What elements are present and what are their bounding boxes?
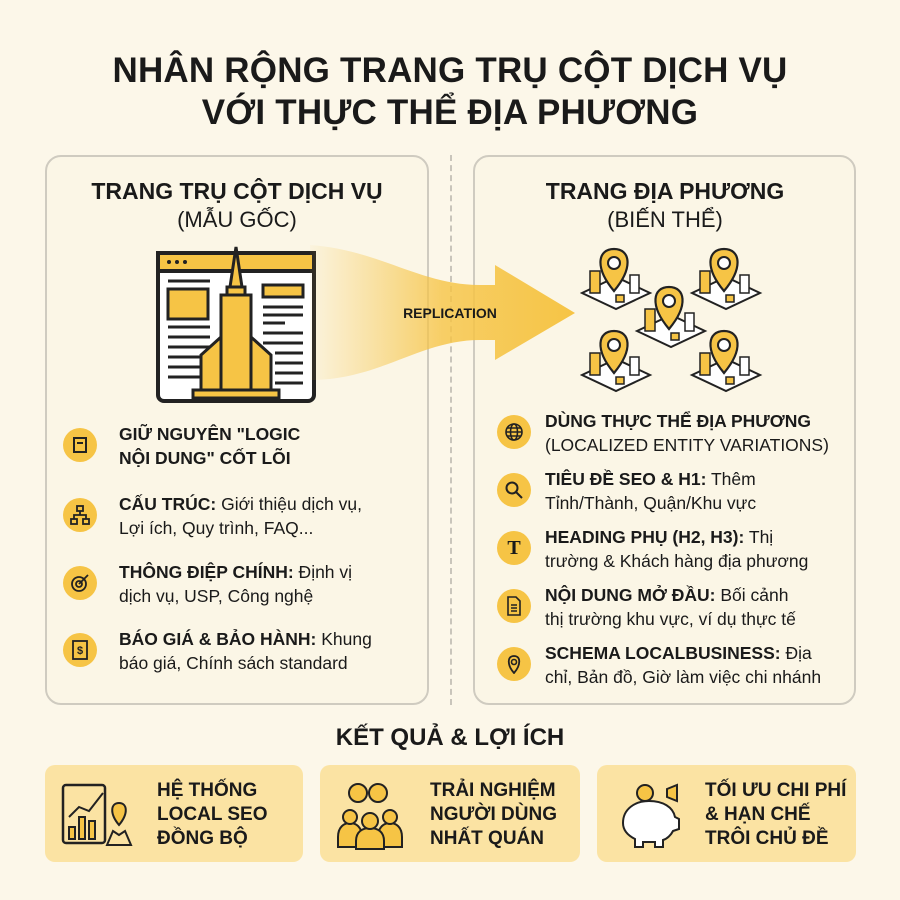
item 3 xyxy=(497,527,808,571)
panel heading: (MẪU GỐC) xyxy=(177,207,297,232)
panel heading: TRANG ĐỊA PHƯƠNG xyxy=(546,178,784,204)
arrow: replication: REPLICATION xyxy=(403,305,497,321)
item 5 xyxy=(497,643,821,687)
item 3: trường & Khách hàng địa phương xyxy=(545,551,808,571)
card text: TRÔI CHỦ ĐỀ xyxy=(705,828,828,849)
icon: people xyxy=(337,783,403,850)
item 1 xyxy=(497,411,829,455)
item 2: CẤU TRÚC: Giới thiệu dịch vụ, xyxy=(119,494,362,514)
card text xyxy=(705,778,847,849)
card text: HỆ THỐNG xyxy=(157,780,257,801)
card text xyxy=(157,778,268,849)
panel: left xyxy=(45,155,429,705)
item 1: NỘI DUNG" CỐT LÕI xyxy=(119,448,291,468)
item 4: thị trường khu vực, ví dụ thực tế xyxy=(545,609,796,629)
item 3: HEADING PHỤ (H2, H3): Thị xyxy=(545,527,773,547)
card text: & HẠN CHẾ xyxy=(705,804,811,825)
icon: piggy bank xyxy=(622,784,680,848)
card text xyxy=(430,778,557,849)
item 3: dịch vụ, USP, Công nghệ xyxy=(119,586,313,606)
panel heading: TRANG TRỤ CỘT DỊCH VỤ xyxy=(91,178,383,204)
section heading: results: KẾT QUẢ & LỢI ÍCH xyxy=(336,724,564,751)
title: NHÂN RỘNG TRANG TRỤ CỘT DỊCH VỤ xyxy=(112,51,788,90)
item 3: T xyxy=(507,536,521,558)
divider xyxy=(450,155,452,705)
title: VỚI THỰC THỂ ĐỊA PHƯƠNG xyxy=(202,93,698,132)
panel heading: (BIẾN THỂ) xyxy=(607,207,723,232)
item 3 xyxy=(63,562,352,606)
arrow: replication xyxy=(310,246,575,380)
item 1 xyxy=(63,424,300,468)
icon: location cluster xyxy=(580,248,762,392)
item 4 xyxy=(497,585,796,629)
item 3: THÔNG ĐIỆP CHÍNH: Định vị xyxy=(119,562,352,582)
item 4: BÁO GIÁ & BẢO HÀNH: Khung xyxy=(119,629,372,649)
panel: right xyxy=(473,155,856,705)
card text: TRẢI NGHIỆM xyxy=(430,780,556,801)
item 5: SCHEMA LOCALBUSINESS: Địa xyxy=(545,643,812,663)
item 2: Tỉnh/Thành, Quận/Khu vực xyxy=(545,493,756,513)
item 2 xyxy=(63,494,362,538)
card text: ĐỒNG BỘ xyxy=(157,828,248,849)
item 2: Lợi ích, Quy trình, FAQ... xyxy=(119,518,313,538)
item 4: NỘI DUNG MỞ ĐẦU: Bối cảnh xyxy=(545,585,788,605)
title xyxy=(112,50,788,132)
item 1: DÙNG THỰC THỂ ĐỊA PHƯƠNG xyxy=(545,411,811,431)
item 2: TIÊU ĐỀ SEO & H1: Thêm xyxy=(545,469,756,489)
card text: NGƯỜI DÙNG xyxy=(430,804,557,825)
card 2 xyxy=(320,765,580,862)
item 5: chỉ, Bản đồ, Giờ làm việc chi nhánh xyxy=(545,667,821,687)
item 4 xyxy=(63,629,372,673)
card text: NHẤT QUÁN xyxy=(430,828,544,849)
card text: LOCAL SEO xyxy=(157,804,268,825)
item 1: GIỮ NGUYÊN "LOGIC xyxy=(119,424,300,444)
item 4: $ xyxy=(77,645,83,657)
item 2 xyxy=(497,469,756,513)
card 3 xyxy=(597,765,856,862)
panel heading xyxy=(91,178,383,232)
icon: chart map xyxy=(62,784,132,846)
card 1 xyxy=(45,765,303,862)
panel heading xyxy=(546,178,784,232)
item 1: (LOCALIZED ENTITY VARIATIONS) xyxy=(545,435,829,455)
item 4: báo giá, Chính sách standard xyxy=(119,653,348,673)
icon: webpage tower xyxy=(156,246,316,403)
card text: TỐI ƯU CHI PHÍ xyxy=(705,780,846,801)
